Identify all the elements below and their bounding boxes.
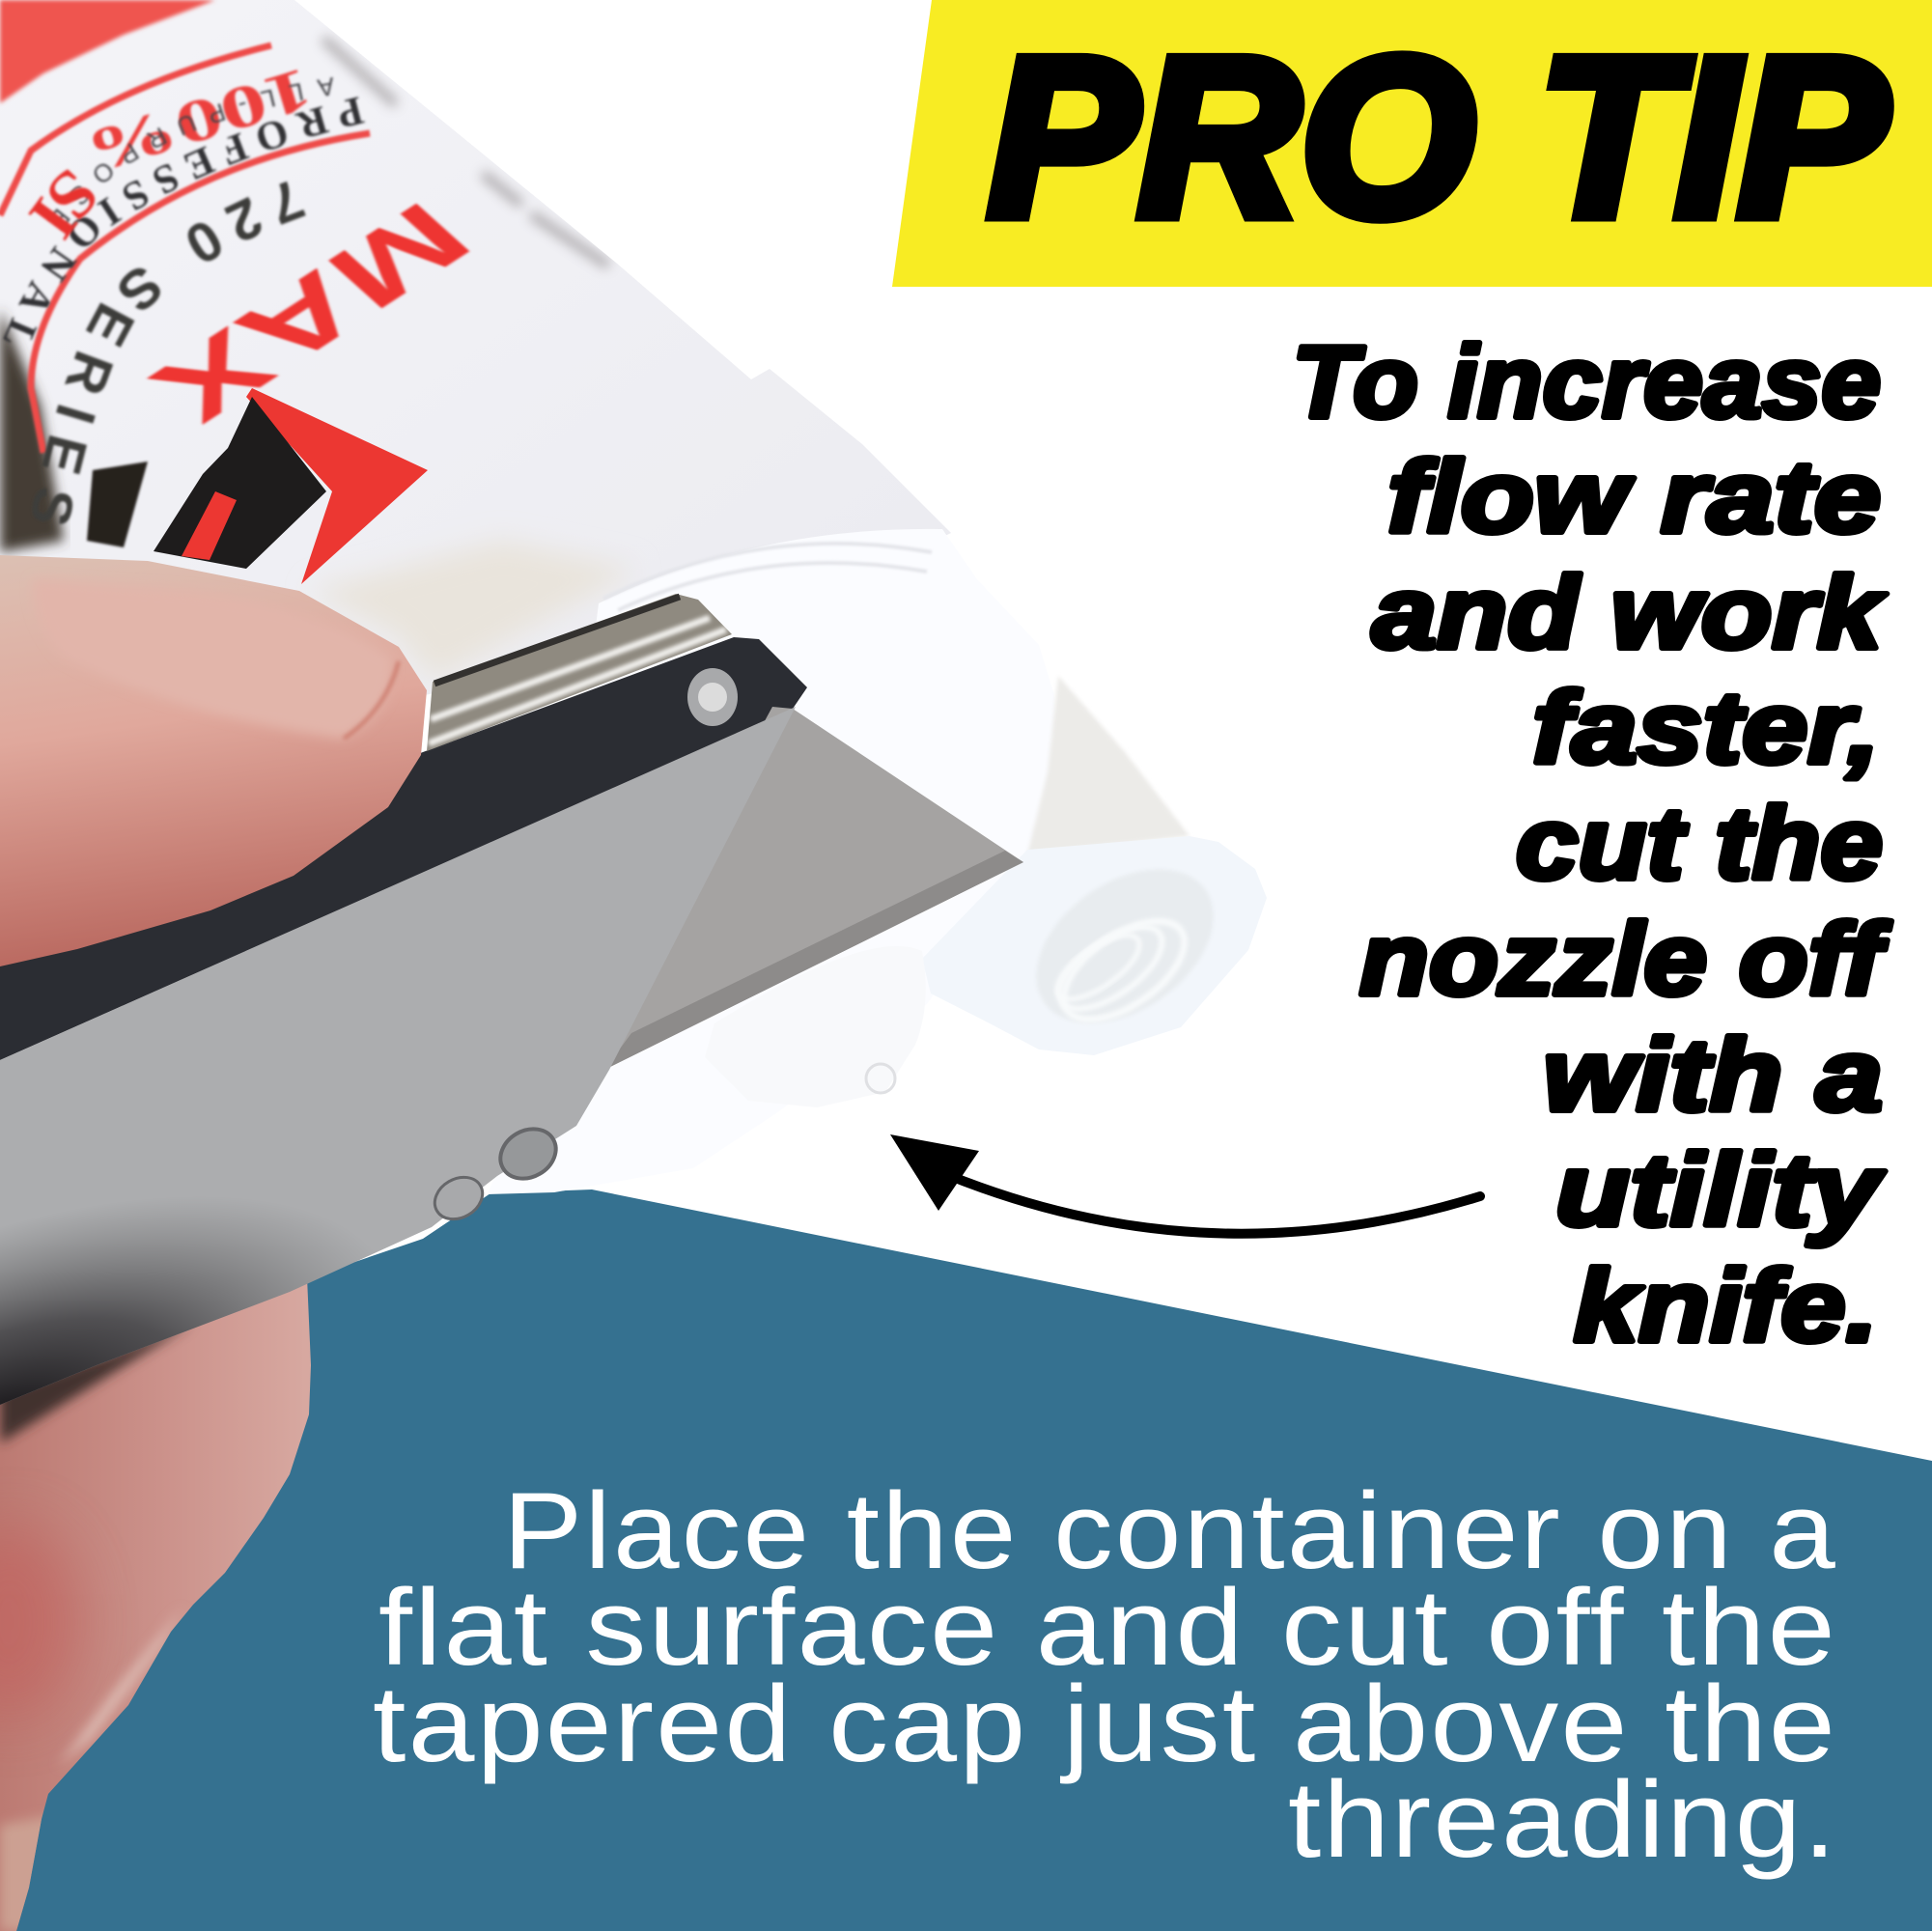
label text: 720 series: 720 SERIES (35, 180, 307, 525)
lower hand (0, 1255, 319, 1931)
text block: placement instruction: tapered cap just above the (373, 1664, 1837, 1784)
blade bevel (604, 851, 1023, 1070)
arrow: points to the cut line (890, 1134, 1480, 1234)
warm shading near thumb (324, 539, 620, 678)
rim ridges (603, 544, 932, 610)
text block: pro tip advice (1292, 325, 1892, 1363)
label text: MAX: MAX (128, 182, 494, 442)
logo: red inner chevron (182, 491, 237, 560)
shadow under knife (0, 1323, 193, 1443)
handle rivet two (427, 1169, 490, 1227)
handle dark shading (0, 1105, 453, 1734)
nozzle lip (922, 836, 1267, 1055)
strip highlights (429, 618, 726, 743)
logo: black chevron (154, 397, 326, 569)
text block: placement instruction: flat surface and cut off the (378, 1567, 1837, 1688)
text block: pro tip advice: and work (1372, 556, 1888, 670)
silver strip (427, 594, 732, 751)
text block: pro tip advice: knife. (1574, 1249, 1878, 1363)
text block: pro tip advice: utility (1555, 1133, 1886, 1247)
tip nub (705, 946, 926, 1107)
black knife plate (0, 637, 807, 1060)
tube label (0, 0, 620, 678)
neck (1027, 676, 1190, 854)
handle rivet one (491, 1119, 565, 1189)
text block: pro tip advice: with a (1543, 1019, 1883, 1133)
wrist tone (0, 1815, 58, 1931)
label text: all-purpose: ALL-PURPOSE (52, 75, 334, 224)
label arcs (0, 45, 370, 453)
thumb (0, 555, 427, 966)
cap flange (488, 529, 1056, 1194)
back print streaks (323, 39, 608, 266)
text block: pro tip advice: To increase (1292, 325, 1881, 439)
knife handle (0, 676, 811, 1734)
cap with neck and nozzle (488, 529, 1267, 1194)
red printed band (0, 0, 215, 103)
logo: red arrow (246, 388, 428, 584)
blade (579, 707, 1023, 1070)
text block: pro tip advice: cut the (1516, 787, 1883, 901)
text block: placement instruction: threading. (1288, 1759, 1838, 1880)
tube body (0, 0, 951, 695)
nozzle threading (1008, 837, 1242, 1055)
nail edge (344, 661, 399, 739)
handle surface (0, 676, 811, 1448)
text block: pro tip advice: faster, (1532, 671, 1880, 785)
text block: pro tip advice: flow rate (1387, 440, 1881, 554)
strip dark top (434, 597, 680, 684)
hand base colour (0, 1255, 319, 1931)
text block: placement instruction: Place the container on a (503, 1470, 1837, 1591)
panel: blue instruction background (10, 1189, 1932, 1931)
plate rivet (687, 668, 738, 726)
label text: 100%: 100% (78, 55, 320, 185)
banner: yellow heading block (892, 0, 1932, 287)
red patch (0, 1525, 77, 1719)
heading: PRO TIP: PRO TIP (988, 10, 1889, 264)
logo: black letter (87, 462, 148, 547)
text block: placement instruction (373, 1470, 1838, 1880)
photo: caulk tube and utility knife (0, 0, 1305, 1931)
thumbnail (33, 579, 391, 739)
label text: professional: PROFESSIONAL (2, 95, 367, 344)
nub end circle (866, 1064, 895, 1093)
label text: silicone: SI (27, 168, 97, 242)
dark label area (0, 309, 64, 552)
text block: pro tip advice: nozzle off (1359, 903, 1892, 1017)
pale skin patch (58, 1608, 183, 1767)
